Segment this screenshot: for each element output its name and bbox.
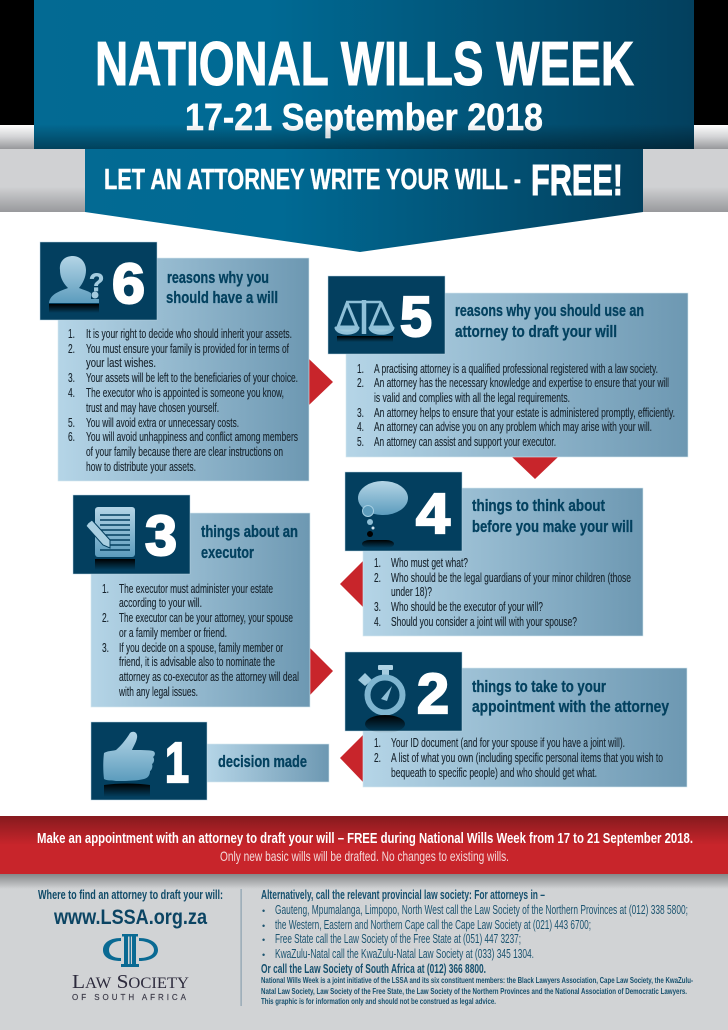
note: Only new basic wills will be drafted. No changes to existing wills. xyxy=(220,848,509,864)
list: 1. xyxy=(374,736,381,750)
provincial contacts: • xyxy=(262,950,265,960)
provincial contacts xyxy=(261,888,688,976)
number 4: 4 xyxy=(416,482,450,546)
list: Your assets will be left to the beneficiaries of your choice. xyxy=(86,371,298,385)
icon: document and pencil xyxy=(86,507,135,570)
subtitle text: LET AN ATTORNEY WRITE YOUR WILL - xyxy=(104,164,521,196)
heading: should have a will xyxy=(166,289,278,307)
list: 3. xyxy=(68,371,75,385)
provincial contacts: • xyxy=(262,935,265,945)
list: 5. xyxy=(68,416,75,430)
panel: 2 things xyxy=(345,652,687,787)
list: your last wishes. xyxy=(86,356,156,370)
arrow: 5 to 4 xyxy=(512,457,558,479)
number 6: 6 xyxy=(112,252,145,316)
panel: 1 decision xyxy=(91,722,329,800)
list xyxy=(374,556,631,629)
heading: executor xyxy=(201,544,254,562)
heading xyxy=(455,302,644,341)
free text: FREE! xyxy=(531,156,623,205)
heading: things to think about xyxy=(472,497,605,515)
list: 4. xyxy=(374,615,381,629)
panel: 4 things xyxy=(345,472,643,636)
icon: person with question mark: ? xyxy=(89,269,104,297)
logo wordmark: LAW SOCIETY xyxy=(72,971,189,993)
heading xyxy=(166,269,278,307)
heading: reasons why you xyxy=(167,269,269,287)
provincial contacts: Or call the Law Society of South Africa at (012) 366 8800. xyxy=(261,962,486,976)
provincial contacts: Alternatively, call the relevant provincial law society: For attorneys in – xyxy=(261,888,545,902)
list: Who must get what? xyxy=(391,556,468,570)
list: Your ID document (and for your spouse if you have a joint will). xyxy=(391,736,625,750)
header background bands xyxy=(0,0,728,212)
icon: thumbs up xyxy=(103,732,155,797)
list: 2. xyxy=(102,611,109,625)
provincial contacts: • xyxy=(262,921,265,931)
number 5: 5 xyxy=(400,285,432,349)
panel: 6 reasons xyxy=(40,242,309,481)
list: 5. xyxy=(357,435,364,449)
disclaimer xyxy=(261,976,693,1006)
list: or a family member or friend. xyxy=(119,626,227,640)
icon: stopwatch xyxy=(358,665,405,733)
list: under 18)? xyxy=(391,585,432,599)
list: Should you consider a joint will with your spouse? xyxy=(391,615,577,629)
heading: things about an xyxy=(201,523,298,541)
heading: decision made xyxy=(218,753,307,771)
heading: reasons why you should use an xyxy=(455,302,644,320)
list: An attorney can assist and support your executor. xyxy=(374,435,556,449)
title banner xyxy=(34,0,694,149)
list: You must ensure your family is provided for in terms of xyxy=(86,342,289,356)
provincial contacts: KwaZulu-Natal call the KwaZulu-Natal Law Society at (033) 345 1304. xyxy=(275,947,534,961)
heading: appointment with the attorney xyxy=(472,698,670,716)
number 1: 1 xyxy=(165,731,189,795)
list: 1. xyxy=(68,327,75,341)
disclaimer: This graphic is for information only and should not be construed as legal advice. xyxy=(261,997,496,1006)
where to find heading: Where to find an attorney to draft your will: xyxy=(38,888,223,902)
list xyxy=(102,582,299,699)
list: 1. xyxy=(374,556,381,570)
list xyxy=(374,736,663,780)
list: 1. xyxy=(357,362,364,376)
heading: before you make your will xyxy=(472,518,633,536)
icon: scales of justice xyxy=(336,300,393,342)
list: 1. xyxy=(102,582,109,596)
list: attorney as co-executor as the attorney will deal xyxy=(119,670,299,684)
list xyxy=(357,362,675,449)
list: 2. xyxy=(374,751,381,765)
list: You will avoid extra or unnecessary costs. xyxy=(86,416,239,430)
list: 2. xyxy=(357,376,364,390)
list: The executor must administer your estate xyxy=(119,582,273,596)
logo: law society xyxy=(72,934,189,1002)
list: friend, it is advisable also to nominate the xyxy=(119,655,275,669)
icon: person with question mark xyxy=(49,256,104,313)
panel: 5 reasons xyxy=(328,276,688,457)
footer xyxy=(0,874,728,1030)
arrow: 2 to 1 xyxy=(340,735,363,782)
list: 2. xyxy=(374,571,381,585)
provincial contacts: Free State call the Law Society of the Free State at (051) 447 3237; xyxy=(275,932,521,946)
list: Who should be the executor of your will? xyxy=(391,600,543,614)
number 3: 3 xyxy=(145,504,177,568)
website: www.LSSA.org.za xyxy=(53,906,207,929)
arrow: 6 to 5 xyxy=(309,359,333,405)
list: trust and may have chosen yourself. xyxy=(86,401,219,415)
list: The executor who is appointed is someone you know, xyxy=(86,386,284,400)
list xyxy=(68,327,298,474)
icon: thought bubble xyxy=(358,481,408,548)
panel: 3 things xyxy=(73,495,310,707)
provincial contacts: • xyxy=(262,906,265,916)
list: 4. xyxy=(68,386,75,400)
list: 3. xyxy=(102,641,109,655)
list: of your family because there are clear instructions on xyxy=(86,445,283,459)
list: 4. xyxy=(357,420,364,434)
heading xyxy=(201,523,298,562)
list: 6. xyxy=(68,430,75,444)
list: how to distribute your assets. xyxy=(86,460,196,474)
logo tagline: OF SOUTH AFRICA xyxy=(72,993,187,1002)
date: 17-21 September 2018 xyxy=(185,97,543,139)
heading: things to take to your xyxy=(472,678,606,696)
heading xyxy=(472,497,633,536)
list: according to your will. xyxy=(119,596,202,610)
list: is valid and complies with all the legal requirements. xyxy=(374,391,570,405)
list: 3. xyxy=(374,600,381,614)
list: 2. xyxy=(68,342,75,356)
subtitle banner xyxy=(85,149,643,252)
heading xyxy=(472,678,670,716)
call to action band xyxy=(0,816,728,874)
heading: attorney to draft your will xyxy=(455,323,617,341)
list: with any legal issues. xyxy=(118,685,198,699)
list: bequeath to specific people) and who should get what. xyxy=(391,766,597,780)
list: If you decide on a spouse, family member or xyxy=(119,641,283,655)
arrow: 3 to 2 xyxy=(310,648,333,695)
list: You will avoid unhappiness and conflict among members xyxy=(86,430,298,444)
list: The executor can be your attorney, your spouse xyxy=(119,611,293,625)
arrow: 4 to 3 xyxy=(340,561,363,607)
list: 3. xyxy=(357,406,364,420)
number 2: 2 xyxy=(417,662,449,726)
list: It is your right to decide who should inherit your assets. xyxy=(86,327,292,341)
